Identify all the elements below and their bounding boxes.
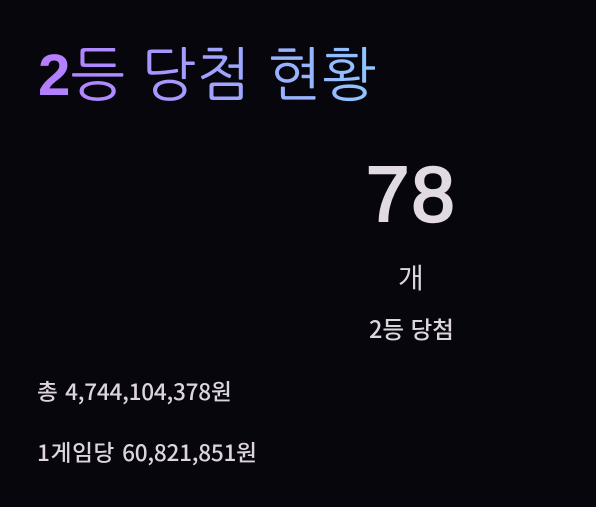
prize per game text: 1게임당 60,821,851원 [37,435,257,468]
total prize text: 총 4,744,104,378원 [37,374,232,407]
stat label: 2등 당첨 [369,311,454,345]
stat number: 78 [366,150,457,238]
stat unit: 개 [398,257,424,297]
